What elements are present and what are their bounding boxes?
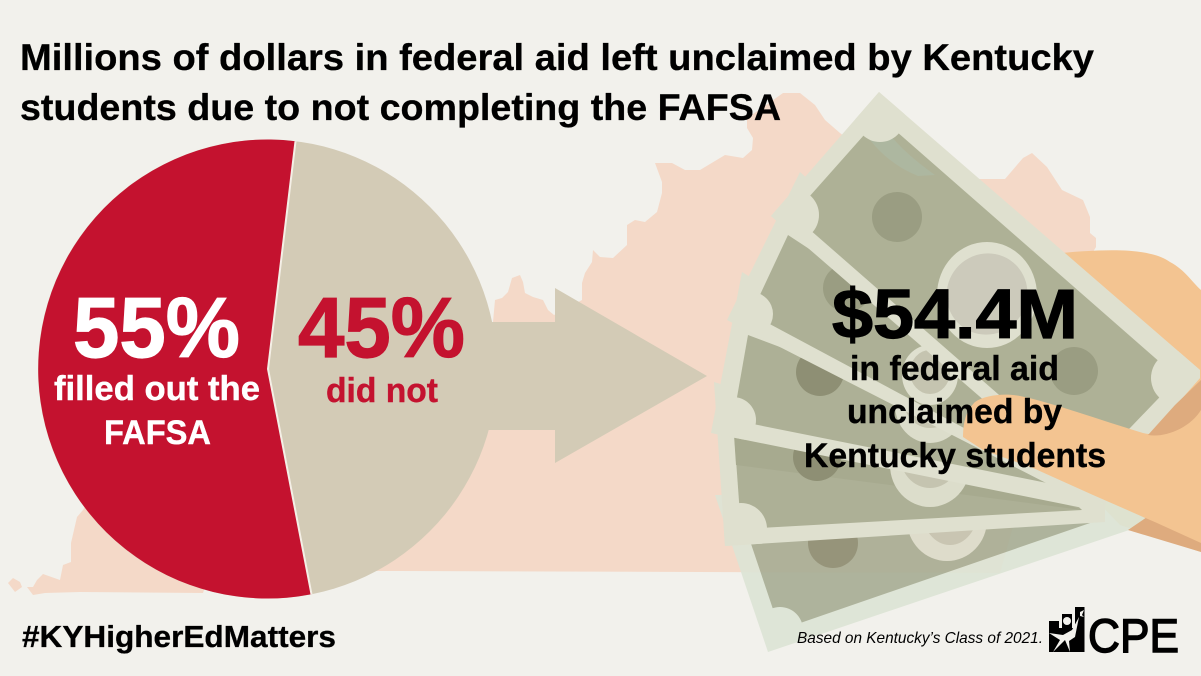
thumb shadow <box>1148 380 1201 436</box>
logo text: CPE <box>1088 609 1179 662</box>
logo: CPE <box>1049 607 1179 662</box>
amount caption: unclaimed by <box>847 393 1062 431</box>
amount: $54.4M <box>832 275 1078 353</box>
amount caption <box>804 350 1106 475</box>
pie chart <box>38 140 497 599</box>
hashtag: #KYHigherEdMatters <box>22 619 336 654</box>
money fan <box>700 90 1201 660</box>
title <box>20 37 1094 128</box>
map: Kentucky silhouette <box>8 93 1096 595</box>
title: students due to not completing the FAFSA <box>20 87 781 128</box>
bill 2 <box>727 172 1067 487</box>
pie slice: did not <box>38 140 497 598</box>
hand fingers <box>963 395 1201 543</box>
bill 3 <box>711 272 1079 508</box>
label: filled out the FAFSA: FAFSA <box>104 414 211 452</box>
amount caption: in federal aid <box>850 350 1059 388</box>
label: 45%: 45% <box>298 281 465 376</box>
label: filled out the FAFSA <box>54 370 260 452</box>
bill 5 <box>715 495 1146 652</box>
source note: Based on Kentucky’s Class of 2021. <box>797 630 1043 647</box>
pie slice: filled out <box>38 140 312 599</box>
label: filled out the FAFSA: filled out the <box>54 370 260 408</box>
label: did not: did not <box>326 372 438 410</box>
amount caption: Kentucky students <box>804 437 1106 475</box>
hand shadow <box>1128 515 1201 552</box>
logo icon <box>1049 607 1084 652</box>
bill 1 <box>771 92 1200 434</box>
callout: $54.4M unclaimed <box>804 275 1106 475</box>
arrow <box>480 288 707 463</box>
label: 55%: 55% <box>73 281 240 376</box>
bill 4 <box>714 382 1090 546</box>
hand back <box>1000 250 1201 552</box>
title: Millions of dollars in federal aid left unclaimed by Kentucky <box>20 37 1094 78</box>
